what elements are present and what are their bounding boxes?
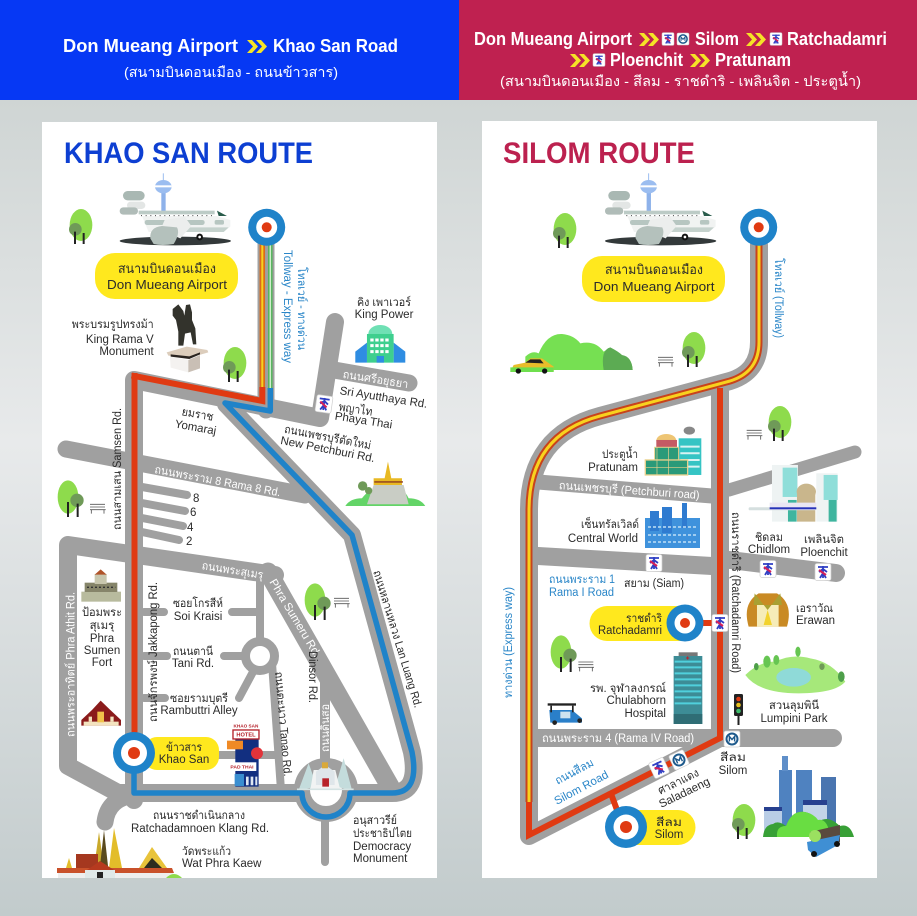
heading: silom route: SILOM ROUTE — [503, 137, 695, 170]
label: samsen road: ถนนสามเสน Samsen Rd. — [112, 408, 124, 530]
icon: bts phaya thai — [315, 394, 333, 414]
label: rama 8 road: ถนนพระราม 8 Rama 8 Rd. — [153, 464, 281, 499]
label: tollway — [281, 250, 309, 363]
icon: bts chidlom — [760, 560, 776, 578]
icon: tree and bench — [747, 406, 791, 441]
label: airport: สนามบินดอนเมือง — [118, 261, 216, 276]
icon: tree — [69, 209, 92, 244]
label: ploenchit: เพลินจิต — [804, 533, 844, 546]
label: dinsor thai: ถนนดินสอ — [319, 704, 332, 752]
label: yomaraj: ยมราช — [181, 406, 214, 424]
labels: side streets 8 6 4 2: 6 — [190, 507, 196, 519]
label: democracy monument: อนุสาวรีย์ — [353, 813, 397, 827]
heading: khao san route: KHAO SAN ROUTE — [64, 137, 313, 170]
label: airport — [582, 256, 725, 302]
label: tani road: Tani Rd. — [172, 658, 214, 670]
label: sri ayutthaya and phaya thai: Phaya Thai — [334, 411, 393, 431]
label: saladaeng: Saladaeng — [657, 776, 712, 811]
icon: tree — [553, 213, 576, 248]
stop: silom — [605, 806, 647, 848]
label: central world: เซ็นทรัลเวิลด์ — [581, 516, 639, 531]
icon: golden mount — [345, 462, 425, 506]
label: tani road: ถนนตานี — [173, 645, 213, 658]
icon: khao san hotel signs: KHAO SAN — [234, 723, 259, 728]
label: democracy monument: ประชาธิปไตย — [353, 827, 412, 840]
label: phra sumen fort: Phra — [90, 633, 115, 645]
icon: airport and plane — [605, 173, 716, 245]
icon: king power building — [355, 325, 405, 363]
label: khao san: Khao San — [159, 754, 209, 766]
label: wat phra kaew: Wat Phra Kaew — [182, 858, 262, 870]
icon: wat phra kaew — [57, 828, 182, 878]
label: chidlom: ชิดลม — [755, 531, 783, 544]
icon: tree — [732, 804, 755, 839]
label: ratchadamnoen klang: ถนนราชดำเนินกลาง — [153, 809, 245, 822]
label: phra sumeru road: Phra Sumeru Rd. — [267, 577, 323, 660]
labels: side streets 8 6 4 2: 2 — [186, 536, 192, 548]
label: rama iv road: ถนนพระราม 4 (Rama IV Road) — [542, 733, 694, 745]
icon: tree — [223, 347, 246, 382]
connector: silom — [610, 791, 617, 810]
icon: fort — [81, 569, 121, 602]
label: soi kraisi — [173, 596, 223, 623]
stop: ratchadamri — [666, 604, 704, 642]
label: rama v monument: Monument — [99, 346, 154, 358]
header: silom band: Ratchadamri — [787, 29, 887, 49]
label: airport: Don Mueang Airport — [107, 277, 227, 292]
icon: tree and bench — [551, 635, 594, 672]
label: rama v monument: พระบรมรูปทรงม้า — [72, 318, 154, 331]
label: silom road: ถนนสีลม — [553, 756, 596, 788]
label: chulabhorn hospital — [590, 681, 666, 720]
label: rama v monument — [72, 318, 154, 358]
icon: mrt saladaeng — [668, 749, 690, 771]
label: silom pill: Silom — [655, 829, 683, 841]
label: central world — [568, 516, 639, 545]
header: khao san band — [0, 0, 459, 100]
label: ploenchit: Ploenchit — [800, 547, 848, 559]
label: phra sumen fort: ป้อมพระ — [82, 606, 122, 619]
label: jakkapong road: ถนนจักรพงษ์ Jakkapong Rd. — [146, 582, 160, 722]
road network: silom — [529, 245, 855, 836]
header: khao san band: Khao San Road — [273, 36, 398, 56]
icon: bush and taxi — [510, 334, 633, 374]
labels: side streets 8 6 4 2 — [186, 493, 199, 548]
label: silom road: Silom Road — [553, 769, 611, 808]
label: khao san — [144, 737, 219, 770]
label: petchburi road: ถนนเพชรบุรี (Petchburi road) — [558, 479, 700, 502]
icon: khao san hotel signs: PAD THAI — [230, 764, 254, 770]
road network: khao san — [66, 240, 414, 862]
label: rama 1 road: ถนนพระราม 1 — [549, 574, 615, 586]
label: rama v monument: King Rama V — [86, 334, 154, 346]
label: silom pill: สีลม — [656, 816, 682, 829]
label: democracy monument: Monument — [353, 853, 408, 865]
panel: silom route — [482, 121, 877, 878]
icon: airport and plane — [120, 173, 231, 245]
icon: erawan shrine — [747, 593, 789, 627]
header: silom band: Silom — [695, 29, 739, 49]
label: chidlom: Chidlom — [748, 544, 790, 556]
label: ratchadamri road: ถนนราชดำริ (Ratchadamri Road) — [729, 512, 742, 673]
icon: pratunam building — [645, 427, 701, 475]
label: wat phra kaew — [182, 845, 262, 870]
route: yellow line — [529, 245, 759, 802]
label: pratunam: ประตูน้ำ — [602, 446, 638, 461]
icon: khao san hotel signs — [227, 723, 263, 787]
label: pratunam — [588, 446, 638, 474]
label: mrt silom: สีลม — [720, 751, 746, 764]
icon: tree and bench — [658, 332, 705, 367]
icon: khao san hotel signs: HOTEL — [236, 733, 256, 739]
label: phra sumeru thai: ถนนพระสุเมรุ — [201, 560, 264, 582]
label: lumpini park: Lumpini Park — [760, 713, 828, 725]
label: siam: สยาม (Siam) — [624, 578, 684, 590]
label: phra athit road: ถนนพระอาทิตย์ Phra Athit Rd. — [64, 592, 78, 737]
stop: airport — [248, 209, 285, 246]
label: rambuttri alley: Rambuttri Alley — [160, 705, 238, 717]
header: silom band — [459, 0, 917, 100]
label: democracy monument: Democracy — [353, 841, 411, 853]
label: erawan — [796, 603, 835, 627]
stop: airport — [740, 209, 777, 246]
icon: rama v statue — [167, 304, 208, 372]
label: tanao road: ถนนตะนาว Tanao Rd. — [272, 671, 293, 777]
label: ratchadamri pill: Ratchadamri — [598, 625, 662, 637]
route: red line — [529, 388, 720, 835]
label: rama 1 road — [549, 574, 615, 599]
label: soi kraisi: Soi Kraisi — [174, 611, 222, 623]
label: tollway: Tollway - Express way — [281, 250, 293, 363]
icon: bts ratchadamri — [712, 614, 728, 632]
icon: bts ploenchit — [815, 564, 831, 580]
label: sri ayutthaya and phaya thai: Sri Ayutthaya Rd. — [339, 385, 428, 411]
label: king power: คิง เพาเวอร์ — [357, 295, 411, 309]
label: ratchadamri pill — [590, 606, 682, 641]
label: erawan: เอราวัณ — [796, 603, 833, 615]
icon: bts saladaeng — [648, 757, 670, 779]
label: erawan: Erawan — [796, 615, 835, 627]
label: sri ayutthaya and phaya thai — [334, 385, 428, 431]
header: silom band: Pratunam — [715, 50, 791, 70]
label: phra sumen fort: Sumen — [84, 645, 120, 657]
label: sri ayutthaya road: ถนนศรีอยุธยา — [342, 368, 409, 391]
icon: bts siam — [646, 554, 662, 572]
icon: tree and bench — [58, 480, 106, 517]
label: silom pill — [626, 810, 696, 845]
label: rambuttri alley: ซอยรามบุตรี — [170, 692, 228, 705]
panel: khao san route — [42, 122, 437, 878]
label: rambuttri alley — [160, 692, 238, 717]
label: sri ayutthaya and phaya thai: พญาไท — [338, 400, 373, 419]
label: airport: สนามบินดอนเมือง — [605, 262, 703, 277]
label: saladaeng: ศาลาแดง — [656, 767, 701, 797]
icon: tuk tuk — [548, 703, 582, 725]
label: ratchadamri pill: ราชดำริ — [626, 612, 662, 625]
header: silom band: Don Mueang Airport — [474, 29, 632, 49]
label: central world: Central World — [568, 533, 638, 545]
label: phra sumen fort: Fort — [92, 657, 113, 669]
label: chulabhorn hospital: Chulabhorn — [607, 695, 666, 707]
labels: side streets 8 6 4 2: 8 — [193, 493, 199, 505]
icon: city skyline and tuk tuk — [763, 756, 854, 857]
stop: khao san — [113, 732, 155, 774]
icon: democracy monument — [297, 758, 354, 790]
label: khao san: ข้าวสาร — [166, 741, 202, 754]
label: mrt silom — [719, 751, 747, 777]
label: tollway: โทลเวย์ (Tollway) — [772, 258, 786, 338]
label: phra sumen fort: สุเมรุ — [90, 620, 114, 632]
route: orange and green tollway stripes — [262, 240, 270, 395]
icon: chidlom buildings — [749, 465, 838, 522]
label: soi kraisi: ซอยโกรสีห์ — [173, 596, 223, 610]
label: king power — [355, 295, 414, 321]
label: chidlom — [748, 531, 790, 556]
route: red path — [132, 373, 262, 745]
labels: side streets 8 6 4 2: 4 — [187, 522, 194, 534]
label: chulabhorn hospital: Hospital — [624, 708, 666, 720]
label: new petchburi: ถนนเพชรบุรีตัดใหม่ — [283, 423, 372, 452]
label: airport: Don Mueang Airport — [594, 279, 715, 294]
label: yomaraj: Yomaraj — [174, 419, 217, 438]
icon: hospital building — [674, 652, 702, 724]
label: lan luang road: ถนนหลานหลวง Lan Luang Rd. — [370, 569, 424, 709]
label: chulabhorn hospital: รพ. จุฬาลงกรณ์ — [590, 681, 666, 695]
icon: traffic light — [734, 694, 743, 725]
label: ratchadamnoen klang — [131, 809, 269, 835]
label: express way: ทางด่วน (Express way) — [503, 587, 515, 698]
header: silom band: (สนามบินดอนเมือง - สีลม - ราชดำริ - เพลินจิต - ประตูน้ำ) — [500, 71, 861, 90]
label: ratchadamnoen klang: Ratchadamnoen Klang Rd. — [131, 823, 269, 835]
label: pratunam: Pratunam — [588, 462, 638, 474]
icon: temple — [81, 701, 121, 726]
label: yomaraj — [174, 406, 217, 438]
label: lumpini park — [760, 699, 828, 725]
label: mrt silom: Silom — [719, 765, 747, 777]
icon: tree and bench — [305, 583, 350, 620]
label: ploenchit — [800, 533, 848, 559]
label: wat phra kaew: วัดพระแก้ว — [182, 845, 231, 858]
label: tani road — [172, 645, 214, 670]
header: khao san band: (สนามบินดอนเมือง - ถนนข้าวสาร) — [124, 64, 338, 80]
header: silom band: Ploenchit — [610, 50, 683, 70]
label: king power: King Power — [355, 309, 414, 321]
header: khao san band: Don Mueang Airport — [63, 36, 238, 56]
label: democracy monument — [353, 813, 412, 865]
icon: mrt silom — [724, 731, 740, 747]
label: lumpini park: สวนลุมพินี — [769, 699, 819, 712]
icon: central world building — [645, 503, 700, 548]
label: tollway: โทลเวย์ - ทางด่วน — [295, 267, 309, 350]
label: new petchburi: New Petchburi Rd. — [279, 435, 376, 465]
connector: ratchadamri — [702, 620, 716, 626]
icon: lumpini park — [745, 647, 845, 693]
label: dinsor: Dinsor Rd. — [306, 651, 318, 703]
label: rama 1 road: Rama I Road — [549, 587, 614, 599]
route: blue path — [134, 388, 414, 817]
label: airport — [95, 253, 238, 299]
label: phra sumen fort — [82, 606, 122, 669]
